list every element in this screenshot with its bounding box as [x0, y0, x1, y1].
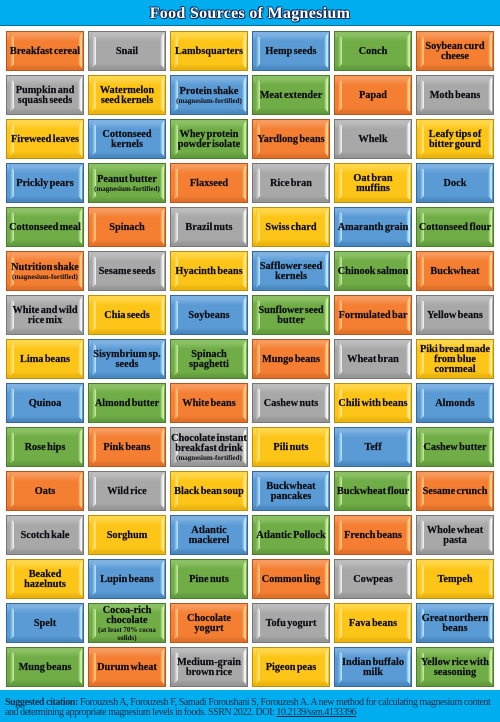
button: Cocoa-rich chocolate: solids): [117, 634, 137, 642]
button: Papad: Papad: [359, 90, 387, 100]
button: French beans: [334, 515, 412, 555]
button: Snail: [88, 31, 166, 71]
button: Yellow rice with seasoning: [416, 647, 494, 687]
button: Yellow beans: Yellow beans: [427, 310, 483, 320]
button: Beaked hazelnuts: [6, 559, 84, 599]
button: Atlantic Pollock: Atlantic Pollock: [256, 530, 326, 540]
button: Pink beans: [88, 427, 166, 467]
button: Cottonseed kernels: [88, 119, 166, 159]
button: Cottonseed flour: Cottonseed flour: [419, 222, 491, 232]
button: Fireweed leaves: [6, 119, 84, 159]
button: Meat extender: [252, 75, 330, 115]
button: Piki bread made from blue cornmeal: Piki bread made: [420, 344, 490, 354]
button: Brazil nuts: [170, 207, 248, 247]
button: Sisymbrium sp. seeds: seeds: [116, 358, 138, 370]
button: Hemp seeds: Hemp seeds: [265, 46, 317, 56]
button: Yellow rice with seasoning: seasoning: [434, 666, 476, 678]
button: Whey protein powder isolate: [170, 119, 248, 159]
button: Oats: Oats: [35, 486, 55, 496]
button: Cottonseed meal: Cottonseed meal: [9, 222, 81, 232]
suggested citation footer: and determining appropriate magnesium levels in foods. SSRN 2022. DOI: 10.2139/ssrn.4133396: [5, 707, 356, 718]
button: Medium-grain brown rice: brown rice: [186, 666, 232, 678]
button: Wild rice: Wild rice: [107, 486, 147, 496]
button: Rose hips: Rose hips: [25, 442, 65, 452]
button: Sunflower seed butter: Sunflower seed: [258, 304, 324, 316]
button: Amaranth grain: Amaranth grain: [338, 222, 408, 232]
button: Mung beans: Mung beans: [19, 662, 71, 672]
button: Cashew butter: [416, 427, 494, 467]
button: Chili with beans: Chili with beans: [338, 398, 408, 408]
button: Chinook salmon: [334, 251, 412, 291]
button: Hemp seeds: [252, 31, 330, 71]
button: Swiss chard: [252, 207, 330, 247]
button: Swiss chard: Swiss chard: [265, 222, 317, 232]
button: Great northern beans: [416, 603, 494, 643]
button: Great northern beans: beans: [442, 622, 468, 634]
button: Sunflower seed butter: [252, 295, 330, 335]
button: Teff: [334, 427, 412, 467]
button: Breakfast cereal: Breakfast cereal: [10, 46, 80, 56]
button: Breakfast cereal: [6, 31, 84, 71]
button: Prickly pears: [6, 163, 84, 203]
button: Rice bran: Rice bran: [270, 178, 312, 188]
button: Soybean curd cheese: [416, 31, 494, 71]
button: Common ling: Common ling: [262, 574, 320, 584]
button: Cocoa-rich chocolate: Cocoa-rich: [103, 604, 151, 616]
button: Fireweed leaves: Fireweed leaves: [11, 134, 79, 144]
button: Mungo beans: Mungo beans: [262, 354, 320, 364]
button: Pigeon peas: [252, 647, 330, 687]
button: Lima beans: Lima beans: [20, 354, 70, 364]
button: Chia seeds: Chia seeds: [104, 310, 150, 320]
button: Sisymbrium sp. seeds: Sisymbrium sp.: [93, 348, 161, 360]
button: Yellow rice with seasoning: Yellow rice with: [421, 656, 489, 668]
button: Common ling: [252, 559, 330, 599]
button: Black bean soup: Black bean soup: [174, 486, 244, 496]
button: Rose hips: [6, 427, 84, 467]
button: Formulated bar: [334, 295, 412, 335]
button: Lupin beans: Lupin beans: [100, 574, 154, 584]
button: Flaxseed: [170, 163, 248, 203]
button: Whole wheat pasta: pasta: [443, 534, 467, 546]
button: Medium-grain brown rice: Medium-grain: [177, 656, 241, 668]
button: Watermelon seed kernels: seed kernels: [101, 94, 153, 106]
button: Piki bread made from blue cornmeal: [416, 339, 494, 379]
button: Atlantic mackerel: mackerel: [189, 534, 229, 546]
button: Sesame seeds: Sesame seeds: [99, 266, 155, 276]
button: Protein shake: Protein shake: [180, 86, 238, 96]
button: Cottonseed kernels: kernels: [111, 138, 143, 150]
button: Pili nuts: Pili nuts: [273, 442, 309, 452]
button: Cottonseed flour: [416, 207, 494, 247]
button: Chili with beans: [334, 383, 412, 423]
button: Chocolate instant breakfast drink: Chocolate instant: [171, 432, 247, 444]
button: Spinach spaghetti: Spinach: [191, 348, 227, 360]
button: Indian buffalo milk: Indian buffalo: [342, 656, 404, 668]
button: Buckwheat: [416, 251, 494, 291]
button: Mungo beans: [252, 339, 330, 379]
button: Chia seeds: [88, 295, 166, 335]
title: [0, 0, 500, 26]
suggested citation footer: Suggested citation: Forouzesh A, Forouzesh F, Samadi Foroushani S, Forouzesh A. A new method for calculating magnesium content: [5, 697, 490, 708]
title: Food Sources of Magnesium: [150, 5, 350, 22]
button: Cowpeas: [334, 559, 412, 599]
button: Buckwheat flour: Buckwheat flour: [337, 486, 409, 496]
button: Nutrition shake: [6, 251, 84, 291]
button: Brazil nuts: Brazil nuts: [185, 222, 233, 232]
button: Whelk: Whelk: [358, 134, 388, 144]
button: Scotch kale: Scotch kale: [21, 530, 69, 540]
button: Lambsquarters: [170, 31, 248, 71]
button: Tofu yogurt: Tofu yogurt: [266, 618, 316, 628]
button: Nutrition shake: Nutrition shake: [11, 262, 79, 272]
button: Fava beans: [334, 603, 412, 643]
button: Hyacinth beans: Hyacinth beans: [175, 266, 243, 276]
button: Conch: Conch: [359, 46, 387, 56]
button: Pumpkin and squash seeds: Pumpkin and: [16, 84, 74, 96]
button: Quinoa: Quinoa: [29, 398, 61, 408]
button: Piki bread made from blue cornmeal: from blue: [434, 354, 476, 364]
button: Buckwheat pancakes: [252, 471, 330, 511]
button: Quinoa: [6, 383, 84, 423]
button: Chocolate instant breakfast drink: [170, 427, 248, 467]
button: Cocoa-rich chocolate: (at least 70% cocoa: [98, 626, 156, 634]
button: Pine nuts: Pine nuts: [189, 574, 229, 584]
button: Buckwheat pancakes: pancakes: [271, 490, 311, 502]
button: Almonds: [416, 383, 494, 423]
button: Chocolate instant breakfast drink: (magnesium-fortified): [176, 454, 242, 462]
button: Spelt: Spelt: [34, 618, 56, 628]
button: White beans: White beans: [182, 398, 236, 408]
button: Peanut butter: [88, 163, 166, 203]
button: Atlantic mackerel: [170, 515, 248, 555]
suggested citation footer: [0, 690, 500, 722]
button: Sunflower seed butter: butter: [277, 314, 305, 326]
button: Cocoa-rich chocolate: [88, 603, 166, 643]
button: Papad: [334, 75, 412, 115]
button: Dock: Dock: [444, 178, 466, 188]
button: Sisymbrium sp. seeds: [88, 339, 166, 379]
button: Lupin beans: [88, 559, 166, 599]
button: Pumpkin and squash seeds: [6, 75, 84, 115]
button: Pili nuts: [252, 427, 330, 467]
button: Yardlong beans: [252, 119, 330, 159]
button: Watermelon seed kernels: Watermelon: [100, 84, 154, 96]
button: Great northern beans: Great northern: [422, 612, 488, 624]
button: Dock: [416, 163, 494, 203]
button: Cowpeas: Cowpeas: [353, 574, 393, 584]
button: Teff: Teff: [364, 442, 382, 452]
button: Chocolate yogurt: Chocolate: [187, 612, 231, 624]
button: Nutrition shake: (magnesium-fortified): [12, 272, 78, 280]
button: Durum wheat: Durum wheat: [97, 662, 157, 672]
button: Watermelon seed kernels: [88, 75, 166, 115]
button: Oat bran muffins: Oat bran: [353, 172, 393, 184]
button: Oat bran muffins: muffins: [356, 182, 390, 194]
button: Moth beans: Moth beans: [430, 90, 480, 100]
button: Black bean soup: [170, 471, 248, 511]
button: Lima beans: [6, 339, 84, 379]
button: Wheat bran: Wheat bran: [347, 354, 399, 364]
button: Soybean curd cheese: Soybean curd: [425, 40, 485, 52]
button: Leafy tips of bitter gourd: Leafy tips of: [429, 128, 481, 140]
button: Buckwheat pancakes: Buckwheat: [266, 480, 316, 492]
button: Beaked hazelnuts: hazelnuts: [24, 578, 66, 590]
button: Whole wheat pasta: Whole wheat: [427, 524, 483, 536]
button: Oat bran muffins: [334, 163, 412, 203]
button: Spinach spaghetti: spaghetti: [189, 358, 229, 370]
button: Meat extender: Meat extender: [260, 90, 322, 100]
button: Soybeans: Soybeans: [188, 310, 230, 320]
button: Cashew butter: Cashew butter: [423, 442, 487, 452]
button: Cottonseed meal: [6, 207, 84, 247]
button: French beans: French beans: [344, 530, 402, 540]
button: Pigeon peas: Pigeon peas: [266, 662, 316, 672]
button: Soybeans: [170, 295, 248, 335]
button: Spinach: [88, 207, 166, 247]
button: Safflower seed kernels: Safflower seed: [260, 260, 322, 272]
button: Buckwheat flour: [334, 471, 412, 511]
button: Cashew nuts: [252, 383, 330, 423]
button: Beaked hazelnuts: Beaked: [29, 568, 61, 580]
button: Safflower seed kernels: kernels: [275, 270, 307, 282]
button: Cocoa-rich chocolate: chocolate: [106, 614, 148, 626]
button: White and wild rice mix: [6, 295, 84, 335]
button: Hyacinth beans: [170, 251, 248, 291]
button: Wheat bran: [334, 339, 412, 379]
button: Peanut butter: (magnesium-fortified): [94, 184, 160, 192]
button: Whey protein powder isolate: powder isolate: [178, 138, 240, 150]
button: Moth beans: [416, 75, 494, 115]
button: Indian buffalo milk: [334, 647, 412, 687]
button: Buckwheat: Buckwheat: [430, 266, 480, 276]
button: Prickly pears: Prickly pears: [16, 178, 74, 188]
button: Cottonseed kernels: Cottonseed: [102, 128, 152, 140]
button: White and wild rice mix: White and wild: [12, 304, 78, 316]
button: Sesame crunch: Sesame crunch: [423, 486, 487, 496]
button: Chinook salmon: Chinook salmon: [338, 266, 408, 276]
button: Medium-grain brown rice: [170, 647, 248, 687]
button: Lambsquarters: Lambsquarters: [175, 46, 243, 56]
button: Snail: Snail: [116, 46, 138, 56]
button: Amaranth grain: [334, 207, 412, 247]
button: Cashew nuts: Cashew nuts: [264, 398, 318, 408]
button: Chocolate yogurt: yogurt: [194, 622, 224, 634]
button: Tempeh: Tempeh: [437, 574, 473, 584]
button: Sorghum: Sorghum: [107, 530, 147, 540]
button: Whey protein powder isolate: Whey protein: [180, 128, 238, 140]
button: Chocolate yogurt: [170, 603, 248, 643]
button: Protein shake: (magnesium-fortified): [176, 96, 242, 104]
button: Mung beans: [6, 647, 84, 687]
button: Peanut butter: Peanut butter: [97, 174, 157, 184]
button: Piki bread made from blue cornmeal: cornmeal: [434, 364, 476, 374]
button: Conch: [334, 31, 412, 71]
button: Durum wheat: [88, 647, 166, 687]
button: Almond butter: Almond butter: [95, 398, 159, 408]
button: Sorghum: [88, 515, 166, 555]
button: White beans: [170, 383, 248, 423]
button: Almond butter: [88, 383, 166, 423]
button: Chocolate instant breakfast drink: breakfast drink: [175, 442, 243, 454]
button: Spinach: Spinach: [109, 222, 145, 232]
button: Spelt: [6, 603, 84, 643]
button: Indian buffalo milk: milk: [363, 666, 383, 678]
button: Protein shake: [170, 75, 248, 115]
button: Atlantic mackerel: Atlantic: [191, 524, 227, 536]
button: Tempeh: [416, 559, 494, 599]
button: Pumpkin and squash seeds: squash seeds: [18, 94, 72, 106]
button: Formulated bar: Formulated bar: [339, 310, 407, 320]
button: Leafy tips of bitter gourd: [416, 119, 494, 159]
button: Pine nuts: [170, 559, 248, 599]
button: Safflower seed kernels: [252, 251, 330, 291]
button: Almonds: Almonds: [435, 398, 475, 408]
button: Sesame seeds: [88, 251, 166, 291]
button: Rice bran: [252, 163, 330, 203]
button: Tofu yogurt: [252, 603, 330, 643]
button: Flaxseed: Flaxseed: [190, 178, 228, 188]
button: Pink beans: Pink beans: [103, 442, 151, 452]
button: Leafy tips of bitter gourd: bitter gourd: [429, 138, 481, 150]
button: Atlantic Pollock: [252, 515, 330, 555]
button: Yellow beans: [416, 295, 494, 335]
button: Spinach spaghetti: [170, 339, 248, 379]
button: Scotch kale: [6, 515, 84, 555]
button: Whole wheat pasta: [416, 515, 494, 555]
button: Yardlong beans: Yardlong beans: [257, 134, 325, 144]
button: Wild rice: [88, 471, 166, 511]
button: Soybean curd cheese: cheese: [441, 50, 469, 62]
button: Whelk: [334, 119, 412, 159]
button: White and wild rice mix: rice mix: [28, 314, 62, 326]
button: Fava beans: Fava beans: [349, 618, 397, 628]
button: Oats: [6, 471, 84, 511]
button: Sesame crunch: [416, 471, 494, 511]
